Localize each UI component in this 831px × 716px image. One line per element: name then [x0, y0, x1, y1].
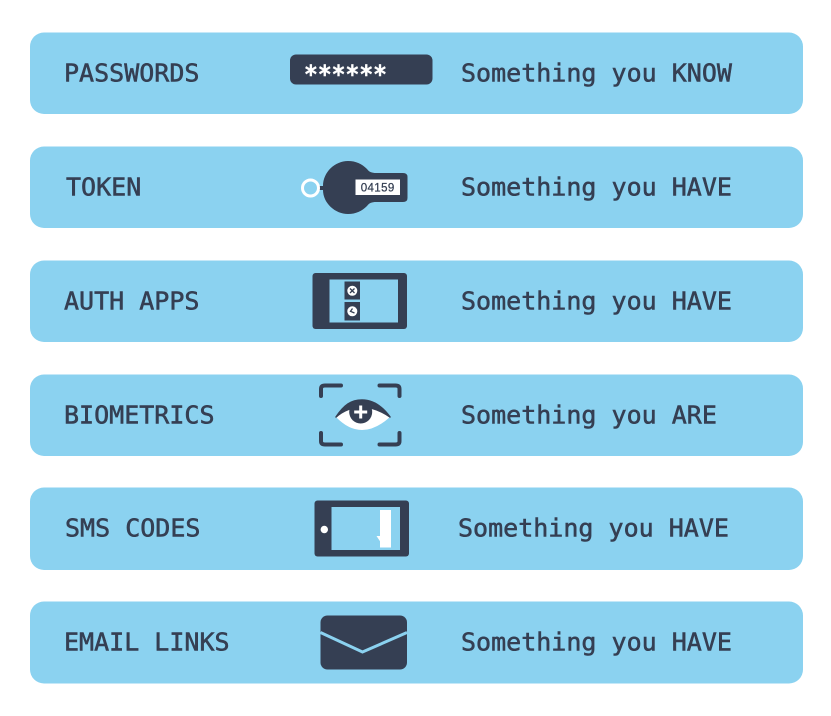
label: biometrics: BIOMETRICS — [64, 400, 215, 430]
panel: auth apps — [30, 260, 803, 342]
icon: envelope — [320, 616, 407, 670]
icon: password field: ****** — [304, 60, 387, 89]
description: are: Something you ARE — [461, 400, 717, 430]
panel: biometrics — [30, 374, 803, 456]
icon: password field — [290, 54, 432, 89]
panel: sms codes — [30, 488, 803, 570]
description: have: Something you HAVE — [461, 628, 732, 656]
icon: token fob: 04159 — [361, 182, 395, 194]
panel: email links — [30, 602, 803, 684]
icon: phone with message — [314, 500, 409, 556]
icon: phone with app — [312, 273, 407, 329]
label: email links: EMAIL LINKS — [64, 628, 230, 656]
description: have: Something you HAVE — [461, 286, 732, 316]
label: passwords: PASSWORDS — [64, 58, 199, 88]
label: auth apps: AUTH APPS — [64, 286, 199, 316]
description: have: Something you HAVE — [461, 172, 732, 202]
description: have: Something you HAVE — [458, 514, 729, 542]
icon: eye scan — [321, 386, 400, 444]
panel: token — [30, 146, 803, 228]
panel: passwords — [30, 32, 803, 114]
label: token: TOKEN — [66, 172, 141, 202]
description: know: Something you KNOW — [461, 58, 733, 88]
label: sms codes: SMS CODES — [65, 514, 200, 542]
icon: token fob — [302, 161, 408, 214]
